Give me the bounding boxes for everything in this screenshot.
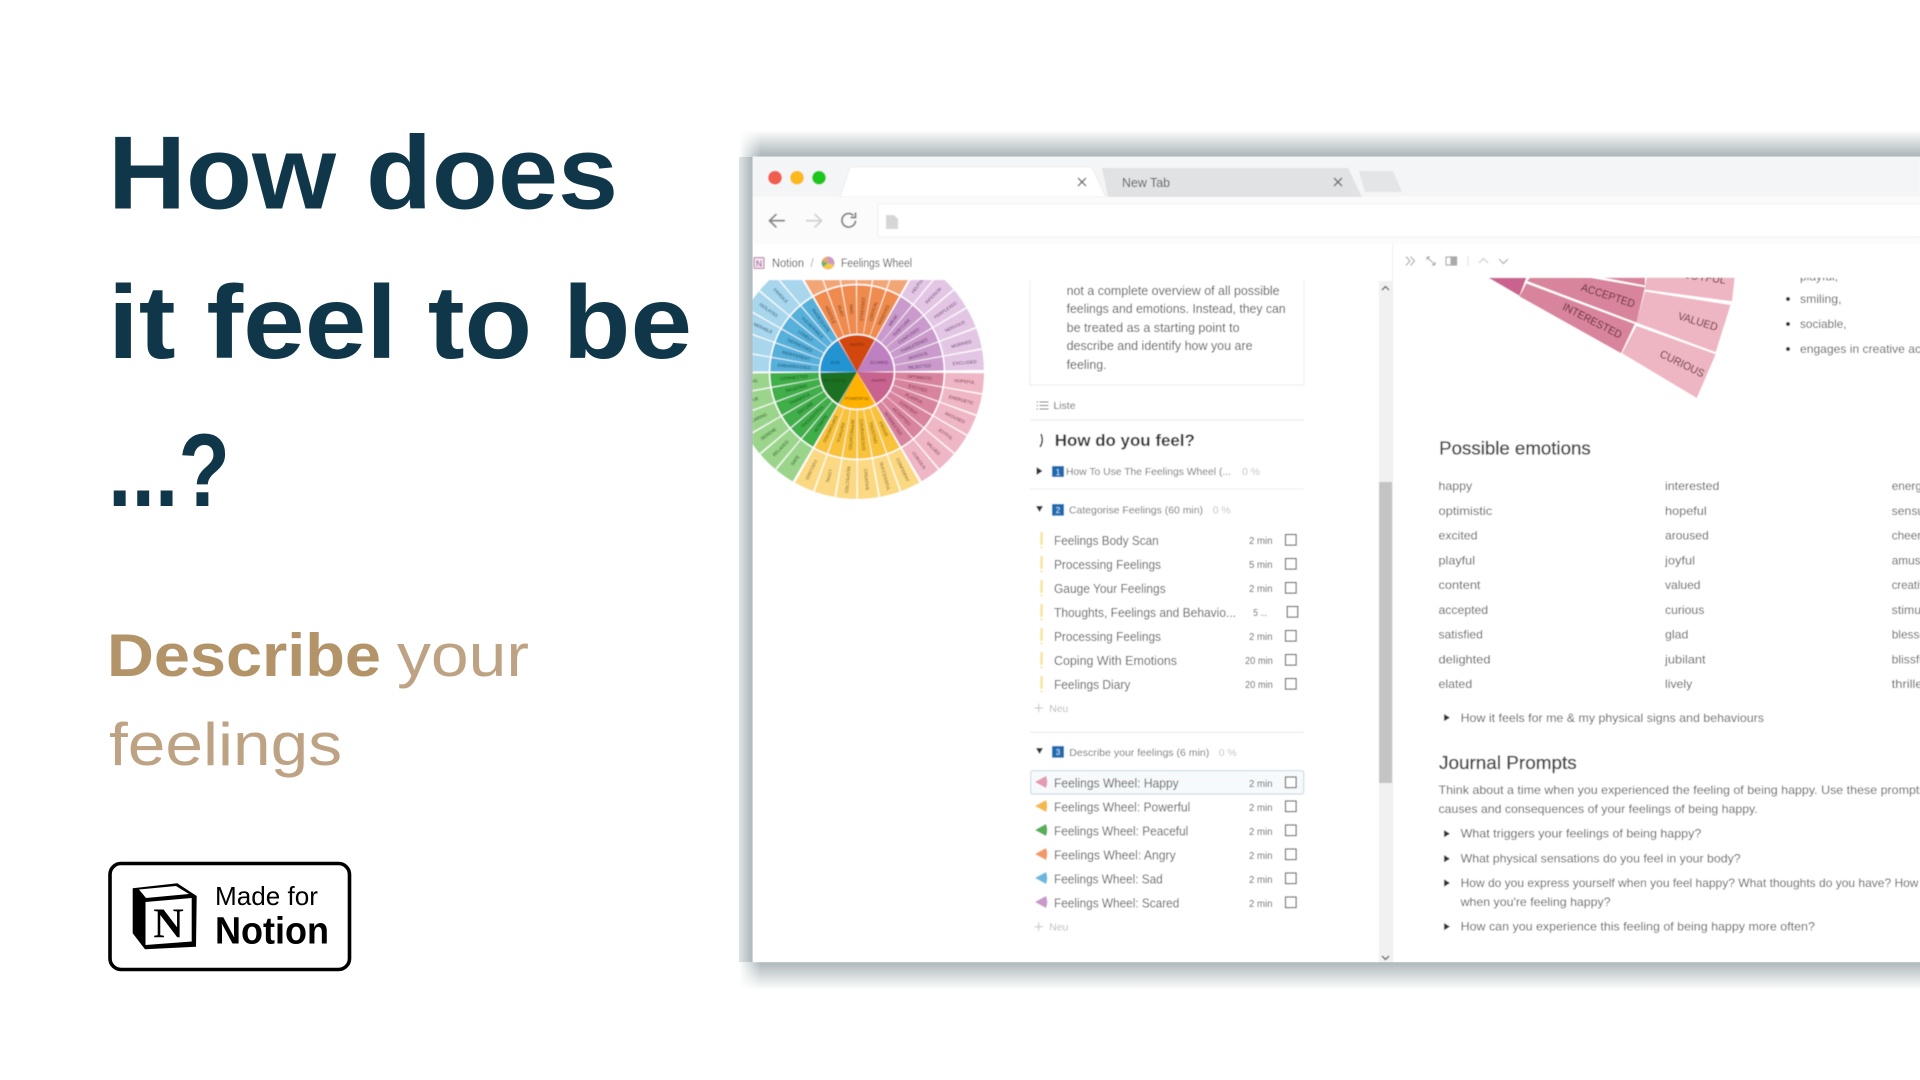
- emotions table: playful: [1438, 554, 1475, 568]
- behaviours bullet list: smiling,: [1800, 292, 1842, 306]
- wheel labels: peaceful: PEACEFUL: [823, 378, 847, 383]
- emotions table: accepted: [1438, 603, 1488, 617]
- wheel labels: sad: [745, 287, 840, 370]
- left column: headline: it feel to be: [108, 265, 692, 381]
- wheel labels: powerful: EMPOWERED: [822, 415, 839, 443]
- middle ring: [772, 287, 942, 457]
- emotions table: satisfied: [1438, 628, 1483, 642]
- section 1: [1030, 466, 1304, 489]
- wheel labels: peaceful: CONNECTED: [780, 374, 808, 381]
- emotions table: lively: [1665, 677, 1692, 691]
- wheel labels: peaceful: [752, 374, 846, 466]
- section 2 list: 2 min: [1249, 536, 1272, 547]
- section 3 list: Feelings Wheel: Angry: [1054, 848, 1176, 862]
- section 3 list: Feelings Wheel: Sad: [1054, 872, 1163, 886]
- wheel labels: happy: ENERGETIC: [948, 394, 974, 406]
- toggle: physical signs: How it feels for me & my physical signs and behaviours: [1461, 711, 1764, 725]
- section 3 list: Feelings Wheel: Peaceful: [1054, 824, 1188, 838]
- heading: possible emotions: Possible emotions: [1439, 438, 1591, 458]
- emotions table: happy: [1438, 479, 1472, 493]
- pink wheel wedge: ACCEPTED: [1579, 282, 1636, 311]
- feelings wheel: [752, 280, 984, 500]
- subtitle: describe your feelings: your: [397, 622, 529, 689]
- wheel labels: peaceful: SECURE: [796, 401, 814, 415]
- icon: page: [886, 215, 898, 229]
- section 3 list: 2 min: [1249, 851, 1272, 862]
- section 3 list: Neu: [1049, 922, 1068, 934]
- emotions table: excited: [1438, 528, 1477, 542]
- wheel labels: scared: ANXIOUS: [908, 351, 928, 361]
- journal prompts toggles: [1444, 827, 1920, 934]
- section 2 list: Feelings Diary: [1054, 677, 1131, 692]
- section 3 list: 2 min: [1249, 875, 1272, 886]
- emotions table: glad: [1665, 628, 1688, 642]
- tab strip: [753, 157, 1920, 197]
- badge: made for notion: [110, 864, 350, 970]
- breadcrumb: Notion: [772, 258, 804, 270]
- section 3 heading: 0 %: [1219, 747, 1237, 759]
- wheel labels: happy: CURIOUS: [911, 451, 927, 470]
- heading: journal prompts: Journal Prompts: [1439, 753, 1577, 773]
- icon: notion logo small: N: [756, 258, 762, 268]
- wheel labels: scared: INFERIOR: [924, 286, 943, 305]
- wheel labels: powerful: TRUSTING: [868, 421, 879, 445]
- icon: forward arrow: [806, 214, 822, 228]
- wheel labels: happy: ACCEPTED: [891, 406, 912, 427]
- section 2 list: Neu: [1049, 703, 1068, 715]
- section 3 list: Feelings Wheel: Powerful: [1054, 800, 1190, 814]
- active tab: [840, 167, 1106, 197]
- emotions table: interested: [1665, 479, 1719, 493]
- wheel labels: peaceful: LOVING: [741, 378, 758, 385]
- wheel labels: angry: [824, 297, 890, 347]
- section 2 list: 2 min: [1249, 584, 1272, 595]
- pink wheel wedge: INTERESTED: [1560, 301, 1624, 341]
- wheel labels: scared: HELPLESS: [910, 273, 928, 294]
- wheel labels: powerful: POWERFUL: [845, 396, 870, 401]
- emotions table: joyful: [1664, 554, 1695, 568]
- icon: notion cube: N: [153, 902, 184, 948]
- wheel labels: sad: FRAGILE: [772, 287, 789, 304]
- badge text: Made for: [215, 881, 318, 911]
- wheel labels: peaceful: CARING: [750, 412, 768, 424]
- wheel labels: sad: INADEQUATE: [811, 307, 831, 333]
- toolbar: [753, 197, 1920, 244]
- wheel labels: peaceful: INTIMATE: [813, 414, 829, 433]
- wheel labels: happy: JOYFUL: [937, 427, 954, 441]
- left column: headline: [108, 116, 692, 529]
- callout box: describe and identify how you are: [1067, 338, 1253, 353]
- journal prompts intro: causes and consequences of your feelings of being happy.: [1438, 802, 1758, 816]
- wheel labels: peaceful: SERENE: [760, 427, 777, 441]
- emotions table: jubilant: [1664, 652, 1706, 666]
- wheel labels: powerful: LOYAL: [825, 469, 833, 484]
- wheel labels: happy: VALUED: [926, 441, 941, 456]
- section 3 heading: Describe your feelings (6 min): [1069, 747, 1209, 759]
- panel: middle page list: [1030, 281, 1304, 934]
- section 2 list: Feelings Body Scan: [1054, 533, 1159, 548]
- emotions table: content: [1438, 578, 1481, 592]
- wheel labels: angry: CRITICAL: [868, 300, 878, 321]
- wheel labels: peaceful: SAFE: [790, 454, 800, 467]
- badge text: Notion: [215, 910, 329, 952]
- wheel labels: peaceful: TRUSTING: [785, 383, 808, 394]
- wheel labels: scared: NERVOUS: [944, 319, 966, 333]
- emotions table: curious: [1665, 603, 1704, 617]
- emotions table: [1438, 479, 1920, 691]
- wheel labels: sad: VULNERABLE: [800, 315, 825, 340]
- wheel labels: powerful: PROUD: [878, 421, 889, 437]
- wheel labels: scared: THREATENED: [900, 337, 928, 354]
- journal prompts toggles: when you're feeling happy?: [1460, 895, 1611, 909]
- wheel labels: angry: ANGRY: [849, 342, 865, 347]
- breadcrumb: [754, 256, 912, 270]
- section 2 list: 5 min: [1249, 560, 1272, 571]
- section 2 list: Processing Feelings: [1054, 557, 1161, 572]
- wheel labels: sad: DEPRESSED: [787, 337, 813, 353]
- wheel labels: sad: INDIFFERENT: [781, 350, 811, 362]
- icon: notion logo small: [754, 258, 764, 268]
- wheel labels: angry: ANNOYED: [877, 304, 890, 326]
- scrollbar: [1379, 281, 1392, 962]
- section 2 heading: 0 %: [1213, 504, 1231, 516]
- wheel labels: sad: VULNERABLE: [745, 318, 773, 335]
- section 2 heading: 2: [1056, 506, 1061, 515]
- journal prompts toggles: What physical sensations do you feel in your body?: [1461, 852, 1741, 866]
- pink wheel wedge: VALUED: [1676, 310, 1719, 334]
- section 3 list: 2 min: [1249, 899, 1272, 910]
- icon: notion cube: [133, 883, 197, 949]
- wheel labels: peaceful: THANKFUL: [788, 391, 812, 406]
- section 2 list: 2 min: [1249, 632, 1272, 643]
- wheel labels: scared: WORRIED: [950, 339, 972, 349]
- wheel labels: sad: LONELY: [797, 329, 814, 343]
- wheel labels: angry: STRESSED: [859, 297, 866, 321]
- emotions table: hopeful: [1665, 504, 1707, 518]
- section 2 list: 5 ...: [1253, 608, 1267, 619]
- section 2 list: Gauge Your Feelings: [1054, 581, 1166, 596]
- new tab button: [1359, 171, 1402, 192]
- window controls: [768, 171, 826, 184]
- wheel labels: powerful: FOCUSED: [805, 459, 818, 481]
- callout box: [1030, 281, 1304, 385]
- wheel labels: angry: MAD: [849, 304, 854, 314]
- wheel labels: angry: HOSTILE: [824, 305, 837, 325]
- subtitle: describe your feelings: feelings: [109, 711, 342, 778]
- wheel labels: sad: SAD: [830, 360, 840, 365]
- address bar: [878, 204, 1920, 237]
- wheel labels: scared: [870, 273, 977, 370]
- wheel labels: powerful: [805, 396, 910, 493]
- wheel labels: happy: AROUSED: [944, 411, 966, 424]
- emotions table: valued: [1665, 578, 1700, 592]
- section 2 list: Coping With Emotions: [1054, 653, 1177, 668]
- journal prompts toggles: What triggers your feelings of being happy?: [1461, 827, 1702, 841]
- callout box: not a complete overview of all possible: [1067, 283, 1280, 298]
- section 2 list: Thoughts, Feelings and Behavio...: [1054, 605, 1236, 620]
- wheel labels: scared: PERPLEXED: [933, 300, 958, 320]
- section 3 list: [1031, 771, 1304, 934]
- wheel labels: happy: OPTIMISTIC: [907, 374, 932, 381]
- wheel labels: scared: INSECURE: [892, 318, 911, 337]
- wheel labels: happy: HAPPY: [872, 378, 887, 383]
- section 2 heading: [1036, 504, 1231, 516]
- callout box: feelings and emotions. Instead, they can: [1067, 301, 1286, 316]
- wheel labels: powerful: RESPECTED: [844, 466, 851, 493]
- journal prompts toggles: How can you experience this feeling of being happy more often?: [1461, 920, 1815, 934]
- breadcrumb: /: [810, 258, 814, 270]
- left column: headline: ...?: [108, 413, 230, 529]
- section 3 list: 2 min: [1249, 803, 1272, 814]
- subtitle: describe your feelings: [107, 622, 529, 778]
- inactive tab: new tab: New Tab: [1122, 175, 1170, 190]
- wheel labels: peaceful: RELAXED: [772, 439, 790, 457]
- pink wheel wedge: [1488, 269, 1735, 398]
- section 2 list: 20 min: [1245, 680, 1273, 691]
- section 2 heading: Categorise Feelings (60 min): [1069, 504, 1203, 516]
- outer ring: [752, 280, 984, 500]
- behaviours bullet list: playful,: [1800, 270, 1838, 284]
- callout box: feeling.: [1067, 357, 1107, 372]
- section 3 heading: [1036, 746, 1237, 759]
- wheel labels: powerful: APPRECIATED: [848, 419, 855, 450]
- wheel labels: powerful: CONFIDENT: [895, 457, 910, 483]
- wheel labels: powerful: COURAGEOUS: [859, 419, 866, 451]
- wheel labels: scared: SCARED: [870, 360, 888, 365]
- emotions table: aroused: [1665, 528, 1709, 542]
- list view tab: Liste: [1054, 400, 1076, 412]
- pink wheel wedge: JOYFUL: [1684, 269, 1727, 287]
- wheel labels: happy: INTERESTED: [883, 411, 903, 436]
- section 3 list: 2 min: [1249, 779, 1272, 790]
- wheel labels: sad: EMBARRASSED: [777, 363, 811, 370]
- wheel labels: peaceful: TRUE: [746, 396, 759, 404]
- section 2 list: [1030, 532, 1304, 732]
- inactive tab: new tab: [1102, 168, 1362, 197]
- subtitle: describe your feelings: Describe: [107, 622, 381, 689]
- section 3 list: Feelings Wheel: Scared: [1054, 896, 1179, 910]
- wheel labels: peaceful: THOUGHTFUL: [800, 404, 825, 429]
- emotions table: elated: [1438, 677, 1472, 691]
- browser window: [711, 157, 1920, 962]
- wheel labels: powerful: SUCCESSFUL: [879, 461, 891, 492]
- list view tab: [1030, 400, 1304, 420]
- wheel labels: scared: WEAK: [887, 314, 899, 327]
- left column: headline: How does: [108, 116, 618, 232]
- wheel labels: happy: EXCITED: [908, 383, 928, 393]
- wheel labels: happy: [872, 374, 976, 470]
- callout box: be treated as a starting point to: [1067, 320, 1240, 335]
- pink wheel wedge: CURIOUS: [1658, 348, 1706, 380]
- section 3 heading: 3: [1056, 748, 1061, 757]
- heading: how do you feel: How do you feel?: [1055, 431, 1195, 450]
- section 2 list: Processing Feelings: [1054, 629, 1161, 644]
- section 3 list: 2 min: [1249, 827, 1272, 838]
- wheel labels: sad: ISOLATED: [758, 302, 779, 318]
- icon: wheel small: [822, 256, 834, 270]
- section 1: How To Use The Feelings Wheel (...: [1066, 466, 1231, 478]
- emotions table: delighted: [1438, 652, 1490, 666]
- wheel labels: happy: CONTENT: [898, 400, 919, 416]
- breadcrumb: Feelings Wheel: [841, 258, 912, 270]
- wheel labels: angry: HURT: [837, 305, 845, 318]
- behaviours bullet list: [1786, 270, 1920, 356]
- peek panel toolbar icons: [1406, 256, 1508, 266]
- wheel labels: happy: HOPEFUL: [954, 378, 976, 385]
- journal prompts intro: [1438, 783, 1920, 816]
- inner ring: [832, 347, 882, 397]
- section 2 list: 20 min: [1245, 656, 1273, 667]
- section 1: 1: [1056, 468, 1061, 477]
- wheel labels: powerful: FAITHFUL: [835, 422, 846, 444]
- wheel labels: powerful: CREATIVE: [863, 469, 870, 491]
- emotions table: optimistic: [1438, 504, 1492, 518]
- behaviours bullet list: sociable,: [1800, 317, 1847, 331]
- section 3 list: Feelings Wheel: Happy: [1054, 776, 1179, 790]
- section 1: 0 %: [1242, 466, 1260, 478]
- badge text: [215, 881, 329, 952]
- wheel labels: scared: EXCLUDED: [952, 359, 977, 366]
- icon: back arrow: [770, 214, 785, 228]
- wheel labels: scared: CONFUSED: [897, 327, 920, 345]
- wheel labels: happy: PLAYFUL: [904, 392, 924, 405]
- icon: reload: [842, 212, 856, 227]
- browser window shadow: [739, 130, 1920, 990]
- wheel labels: scared: REJECTED: [908, 363, 932, 370]
